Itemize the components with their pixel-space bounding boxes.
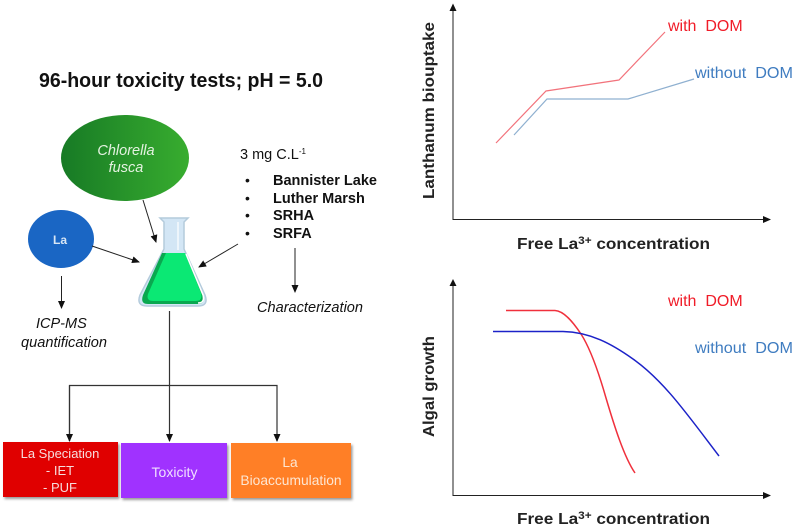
arrow: La to flask (92, 246, 139, 262)
panel: La bioaccumulation (231, 443, 351, 498)
text block: DOM sources: • (245, 207, 250, 223)
panel: La bioaccumulation: Bioaccumulation (240, 473, 342, 488)
text block: DOM sources: Luther Marsh (273, 191, 365, 207)
chart: algal growth: with DOM (667, 293, 743, 310)
chart: lanthanum biouptake: with DOM (667, 18, 743, 35)
panel: La speciation: - PUF (43, 480, 77, 495)
chart: algal growth: Algal growth (421, 336, 438, 437)
text: characterization: Characterization (257, 300, 363, 316)
icon: La circle (28, 210, 94, 268)
arrow: La to ICP-MS (60, 276, 62, 308)
arrows: flask to result boxes (70, 311, 277, 441)
chart axes (453, 280, 770, 496)
chart: algal growth (421, 279, 793, 528)
text: ICP-MS quantification: ICP-MS (36, 316, 87, 332)
chart: lanthanum biouptake: 3+ (578, 235, 592, 247)
chart: lanthanum biouptake: Lanthanum biouptake (421, 22, 438, 199)
chart: algal growth: without DOM (694, 340, 793, 357)
icon: Chlorella fusca ellipse: fusca (109, 160, 143, 176)
icon: Chlorella fusca ellipse (61, 115, 189, 201)
panel: toxicity (121, 443, 227, 498)
title: 96-hour toxicity tests; pH = 5.0 (39, 70, 323, 92)
text: ICP-MS quantification: quantification (21, 335, 107, 351)
chart: algal growth: concentration (592, 511, 710, 528)
text: ICP-MS quantification (21, 316, 107, 351)
text block: DOM sources: • (245, 190, 250, 206)
text block: DOM sources: 3 mg C.L (240, 147, 299, 163)
panel: toxicity: Toxicity (152, 464, 197, 480)
chart: algal growth: Free La (517, 511, 574, 528)
chart: lanthanum biouptake: without DOM (694, 65, 793, 82)
chart: algal growth: 3+ (578, 510, 592, 522)
panel: La speciation (3, 442, 118, 497)
text block: DOM sources: • (245, 225, 250, 241)
panel: La speciation: La Speciation (21, 446, 99, 461)
chart axes (453, 5, 770, 220)
icon: flask (139, 218, 206, 306)
panel: La speciation: - IET (46, 463, 74, 478)
arrow: DOM to flask (199, 244, 238, 267)
arrow: DOM to characterization (294, 248, 296, 292)
text block: DOM sources (240, 147, 377, 242)
icon: Chlorella fusca ellipse: Chlorella (97, 143, 155, 159)
text block: DOM sources: Bannister Lake (273, 173, 377, 189)
chart: lanthanum biouptake: concentration (592, 236, 710, 253)
icon: La circle: La (53, 233, 67, 247)
text block: DOM sources: • (245, 172, 250, 188)
chart: lanthanum biouptake (421, 4, 793, 253)
arrow: Chlorella to flask (143, 200, 156, 242)
chart: lanthanum biouptake: Free La (517, 236, 574, 253)
panel: La bioaccumulation: La (282, 455, 298, 470)
text block: DOM sources: -1 (299, 147, 307, 156)
text block: DOM sources: SRHA (273, 208, 315, 224)
text block: DOM sources: SRFA (273, 226, 312, 242)
